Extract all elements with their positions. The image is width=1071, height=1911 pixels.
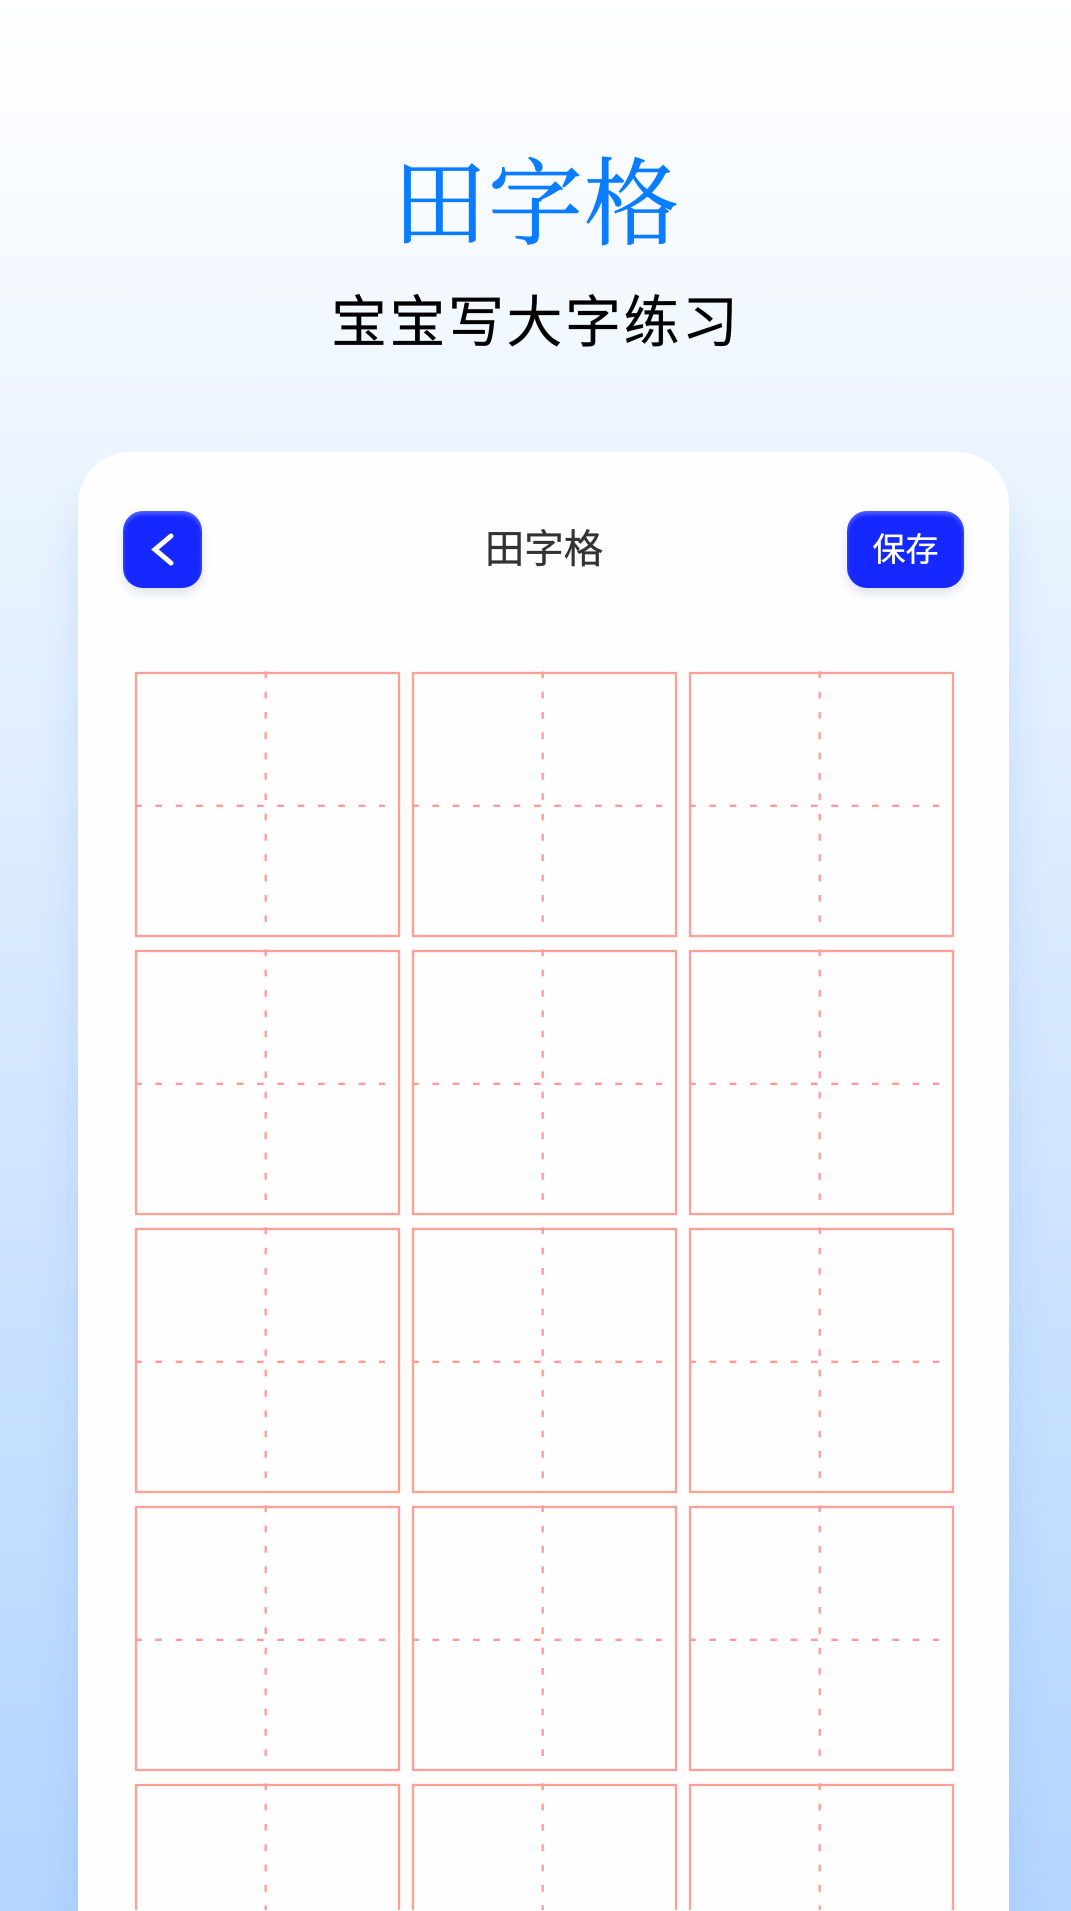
cell row 1 col 3 — [689, 671, 953, 937]
subtitle: 宝宝写大字练习 — [331, 291, 740, 354]
cell row 3 col 3 — [689, 1227, 953, 1493]
cell row 1 col 2 — [412, 671, 676, 937]
button: save: 保存 — [872, 531, 938, 568]
cell row 4 col 2 — [412, 1505, 676, 1771]
title: 田字格 — [392, 152, 680, 258]
cell row 2 col 3 — [689, 949, 953, 1215]
button: back — [123, 511, 202, 588]
heading: navigation title: 田字格 — [485, 528, 603, 572]
button: save — [847, 511, 964, 588]
cell row 3 col 2 — [412, 1227, 676, 1493]
cell row 4 col 3 — [689, 1505, 953, 1771]
cell row 5 col 2 — [413, 1783, 676, 1910]
icon: back chevron — [151, 534, 174, 566]
cell row 2 col 1 — [135, 949, 399, 1215]
cell row 4 col 1 — [135, 1505, 399, 1771]
cell row 2 col 2 — [412, 949, 676, 1215]
cell row 5 col 1 — [136, 1783, 399, 1910]
cell row 1 col 1 — [135, 671, 399, 937]
cell row 5 col 3 — [690, 1783, 953, 1910]
cell row 3 col 1 — [135, 1227, 399, 1493]
panel: writing card — [78, 452, 1009, 1911]
